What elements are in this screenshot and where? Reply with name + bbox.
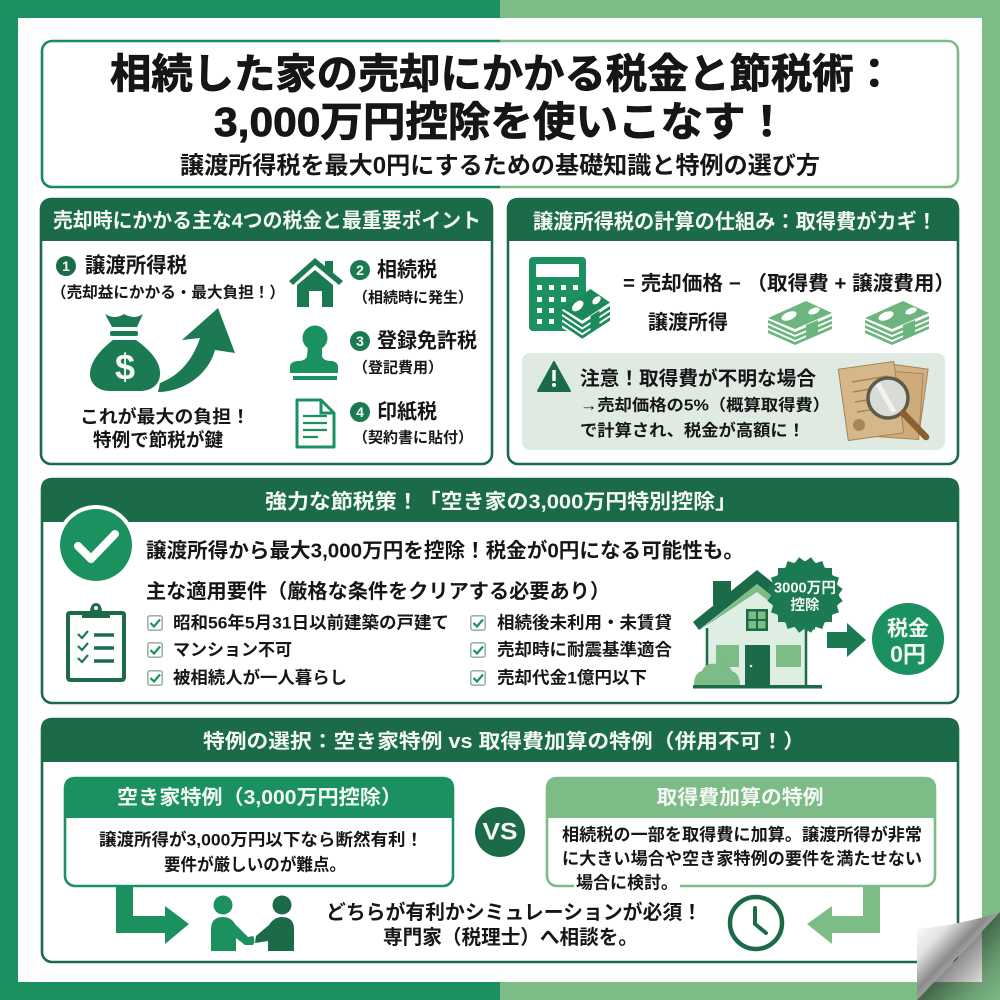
requirement: unused after inheritance: 相続後未利用・未賃貸 <box>497 612 672 632</box>
requirements heading: 主な適用要件（厳格な条件をクリアする必要あり） <box>146 580 610 603</box>
biggest burden note line 2: 特例で節税が鍵 <box>93 430 223 450</box>
card header <box>64 777 454 818</box>
biggest burden note line 1: これが最大の負担！ <box>80 406 250 427</box>
badge: VS <box>475 807 525 857</box>
border gap behind last line <box>574 876 680 890</box>
icon: house illustration <box>693 570 822 688</box>
inheritance tax label: 相続税 <box>377 258 437 282</box>
badge: 30 million yen deduction <box>767 557 843 633</box>
card body line 3: 場合に検討。 <box>576 874 678 892</box>
badge 4 numeral: 4 <box>356 404 364 420</box>
header text: 特例の選択：空き家特例 vs 取得費加算の特例（併用不可！） <box>203 730 805 753</box>
formula: = 売却価格 − （取得費 + 譲渡費用） <box>623 272 955 295</box>
capital gains tax label: 譲渡所得税 <box>85 254 187 278</box>
arrow: right box to consultation <box>807 886 880 944</box>
stamp tax note: （契約書に貼付） <box>353 428 473 446</box>
subtitle: 譲渡所得税を最大0円にするための基礎知識と特例の選び方 <box>180 152 820 180</box>
badge 1 numeral: 1 <box>62 258 70 274</box>
caution heading: 注意！取得費が不明な場合 <box>580 367 816 390</box>
icon: calculator <box>529 257 586 331</box>
panel header <box>41 478 959 522</box>
icon: money bag: $ <box>115 346 135 388</box>
inheritance tax note: （相続時に発生） <box>353 288 473 306</box>
requirement: price limit: 売却代金1億円以下 <box>497 668 647 688</box>
icon: warning triangle <box>538 362 570 391</box>
icon: clock <box>730 897 782 949</box>
header text: 譲渡所得税の計算の仕組み：取得費がカギ！ <box>533 210 937 234</box>
panel header <box>41 718 959 762</box>
registration tax label: 登録免許税 <box>377 330 477 352</box>
arrow: left box to consultation <box>116 886 189 944</box>
advice line 2: 専門家（税理士）へ相談を。 <box>383 926 638 949</box>
caution line 1: →売却価格の5%（概算取得費） <box>580 396 830 414</box>
requirement: decedent lived alone: 被相続人が一人暮らし <box>173 668 347 688</box>
badge: 30 million yen deduction: 3000万円 <box>774 580 836 596</box>
icon: handshake people <box>211 896 294 951</box>
card: acquisition cost provision <box>546 777 936 892</box>
badge 3 numeral: 3 <box>356 333 364 349</box>
card body line 1: 譲渡所得が3,000万円以下なら断然有利！ <box>99 830 423 850</box>
title line 1: 相続した家の売却にかかる税金と節税術： <box>110 51 895 97</box>
icon: check circle <box>56 505 136 585</box>
number badge 4 <box>350 402 370 422</box>
card title: 取得費加算の特例 <box>656 786 824 809</box>
card title: 空き家特例（3,000万円控除） <box>117 786 402 809</box>
card body line 1: 相続税の一部を取得費に加算。譲渡所得が非常 <box>562 824 922 844</box>
page curl corner <box>917 912 1000 1000</box>
panel: vacant house special deduction <box>41 478 959 703</box>
badge: zero tax: 0円 <box>890 641 926 667</box>
card body line 2: 要件が厳しいのが難点。 <box>164 854 346 874</box>
caution line 2: で計算され、税金が高額に！ <box>580 420 805 440</box>
callout: caution <box>522 353 945 450</box>
panel: calculation mechanism <box>507 198 959 464</box>
panel: choosing the special provision <box>41 718 959 962</box>
icon: document <box>297 400 334 447</box>
number badge 3 <box>350 331 370 351</box>
capital gains label: 譲渡所得 <box>648 311 728 334</box>
icon: rising arrow <box>158 308 235 392</box>
badge: VS: VS <box>482 818 518 846</box>
badge 2 numeral: 2 <box>356 262 364 278</box>
deduction statement: 譲渡所得から最大3,000万円を控除！税金が0円になる可能性も。 <box>146 538 744 562</box>
icon: money stack acquisition cost <box>768 301 832 345</box>
badge: zero tax: 税金 <box>887 618 929 640</box>
stamp tax label: 印紙税 <box>377 400 437 424</box>
icon: documents with magnifier <box>838 361 928 441</box>
capital gains note: （売却益にかかる・最大負担！） <box>51 282 285 302</box>
card: vacant house provision <box>64 777 454 886</box>
icon: dark money stack <box>562 289 610 339</box>
number badge 2 <box>350 260 370 280</box>
requirement: built before 1981: 昭和56年5月31日以前建築の戸建て <box>173 612 449 632</box>
icon: money stack transfer cost <box>865 301 929 345</box>
title line 2: 3,000万円控除を使いこなす！ <box>214 99 788 145</box>
icon: clipboard <box>68 603 124 680</box>
header text: 強力な節税策！「空き家の3,000万円特別控除」 <box>265 490 737 514</box>
requirement: earthquake standard: 売却時に耐震基準適合 <box>497 640 672 660</box>
icon: money bag <box>90 314 160 391</box>
badge: 30 million yen deduction: 控除 <box>790 597 820 614</box>
panel header <box>507 198 959 241</box>
header text: 売却時にかかる主な4つの税金と最重要ポイント <box>53 210 481 232</box>
panel header <box>41 198 493 241</box>
number badge 1 <box>56 256 76 276</box>
icon: house <box>289 258 343 307</box>
registration tax note: （登記費用） <box>353 358 443 376</box>
panel: four main taxes <box>41 198 493 464</box>
requirement: no condominiums: マンション不可 <box>173 640 292 660</box>
card header <box>546 777 936 818</box>
card body line 2: に大きい場合や空き家特例の要件を満たせない <box>562 848 922 868</box>
title block <box>42 41 958 187</box>
badge: zero tax <box>872 603 944 675</box>
icon: stamp <box>290 326 338 380</box>
advice line 1: どちらが有利かシミュレーションが必須！ <box>326 900 702 924</box>
arrow to zero tax <box>827 623 866 657</box>
